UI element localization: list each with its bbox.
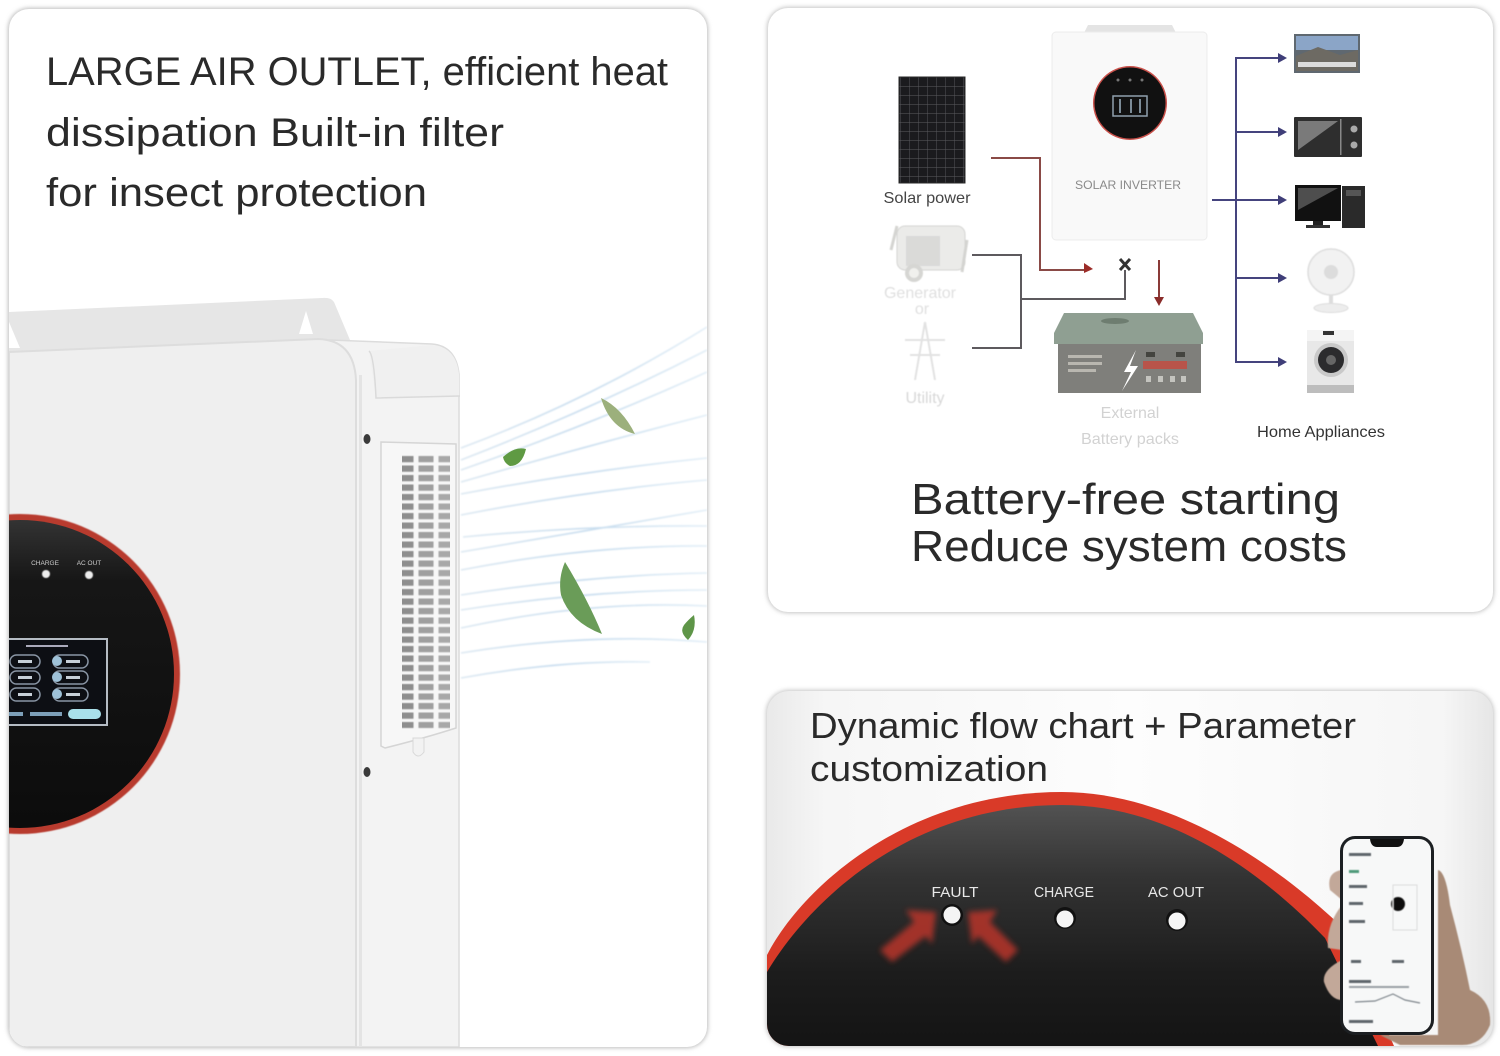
label: solar power: Solar power	[884, 190, 971, 207]
icon: tv	[1294, 34, 1360, 73]
side housing	[330, 340, 460, 1047]
icon: x junction	[1120, 259, 1130, 270]
icon: washing machine	[1307, 330, 1354, 393]
label: solar inverter: SOLAR INVERTER	[1075, 178, 1181, 192]
heading: battery-free starting	[911, 475, 1347, 571]
hand	[1324, 870, 1490, 1045]
icon: microwave	[1294, 117, 1362, 157]
panel: battery-free starting	[767, 7, 1494, 613]
app contents	[1349, 853, 1420, 1023]
screws	[364, 434, 370, 777]
indicator labels: AC OUT	[1148, 884, 1204, 901]
indicator labels: FAULT	[932, 884, 978, 901]
leaves	[503, 398, 695, 640]
label: generator or	[884, 285, 957, 318]
utility tower icon	[905, 322, 945, 407]
display dome	[767, 792, 1394, 1046]
label: generator or: or	[915, 301, 930, 318]
heading: air outlet: for insect protection	[46, 171, 427, 215]
LED labels: CHARGE	[31, 560, 60, 567]
label: home appliances: Home Appliances	[1257, 424, 1385, 441]
icon: desktop pc	[1295, 185, 1365, 228]
LED labels	[31, 560, 102, 565]
flow lines	[972, 58, 1280, 362]
heading: dynamic flow chart: Dynamic flow chart + Parameter	[810, 705, 1356, 746]
label: external battery packs	[1081, 405, 1179, 448]
phone	[1340, 836, 1434, 1035]
red arrows	[880, 910, 1018, 962]
inverter body illustration	[0, 298, 707, 1047]
panel: air outlet	[0, 8, 708, 1048]
LEDs	[42, 570, 93, 579]
label: utility: Utility	[905, 390, 945, 407]
arrowheads	[1084, 53, 1287, 367]
air vent	[381, 442, 456, 756]
heading: air outlet	[46, 50, 668, 215]
mounting bracket	[9, 298, 350, 352]
heading: dynamic flow chart	[810, 705, 1356, 789]
label: external battery packs: External	[1101, 405, 1159, 422]
icon: fan	[1308, 249, 1354, 312]
battery icon	[1054, 313, 1203, 448]
heading: air outlet: dissipation Built-in filter	[46, 111, 504, 155]
indicator labels	[932, 884, 1204, 901]
label: external battery packs: Battery packs	[1081, 431, 1179, 448]
touch screen	[3, 639, 107, 725]
generator icon	[884, 226, 967, 318]
front face	[9, 339, 356, 1047]
inverter illustration	[1052, 25, 1207, 240]
heading: air outlet: LARGE AIR OUTLET, efficient heat	[46, 50, 668, 94]
label: generator or: Generator	[884, 285, 957, 302]
indicator LEDs	[941, 904, 1188, 931]
heading: battery-free starting: Battery-free starting	[911, 475, 1340, 524]
air flow streaks	[461, 327, 707, 678]
heading: dynamic flow chart: customization	[810, 748, 1048, 789]
control display disc	[0, 514, 180, 834]
panel: dynamic flow chart	[766, 690, 1494, 1047]
solar panel icon	[884, 77, 971, 207]
indicator labels: CHARGE	[1034, 884, 1094, 901]
LED labels: AC OUT	[77, 560, 101, 567]
heading: battery-free starting: Reduce system costs	[911, 522, 1347, 571]
